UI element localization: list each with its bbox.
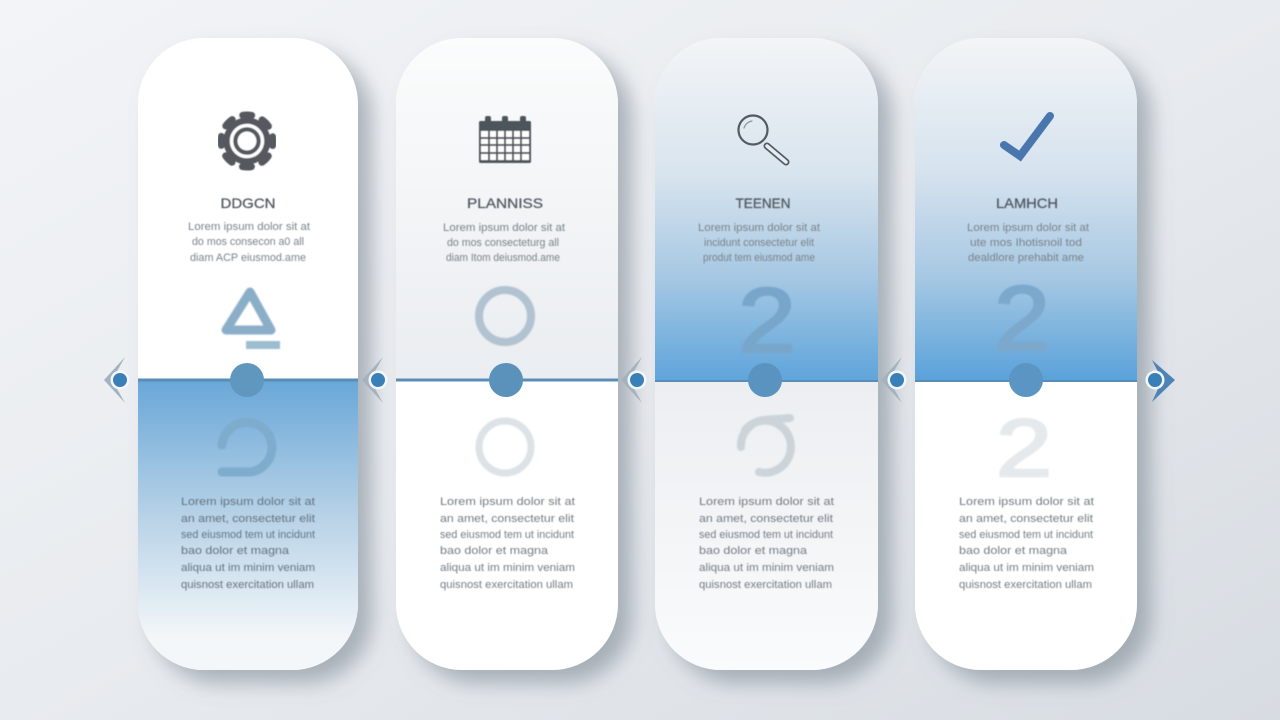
text block: step 3 lower: quisnost exercitation ullam: [699, 579, 832, 591]
text block: step 1 upper: [188, 221, 310, 264]
text block: step 4 lower: bao dolor et magna: [959, 545, 1068, 557]
text block: step 4 lower: aliqua ut im minim veniam: [959, 562, 1094, 574]
arrow: left chevron 1: [104, 357, 130, 403]
text block: step 1 lower: aliqua ut im minim veniam: [181, 562, 315, 574]
text block: step 3 lower: [699, 496, 834, 591]
text block: step 1 lower: [181, 496, 315, 591]
numeral: upper 2: 2: [994, 268, 1050, 370]
numeral: lower 2: 2: [996, 403, 1052, 494]
icon: lower arc numeral: [741, 418, 791, 473]
text block: step 3 lower: aliqua ut im minim veniam: [699, 562, 834, 574]
arrow: left chevron 4: [881, 357, 906, 403]
text block: step 2 upper: diam Itom deiusmod.ame: [446, 252, 560, 264]
heading: step 4: LAMHCH: [996, 195, 1058, 211]
panel: step 2 planning: [396, 38, 618, 670]
text block: step 4 lower: sed eiusmod tem ut incidunt: [959, 529, 1093, 541]
numeral: upper 2: 2: [738, 270, 796, 372]
text block: step 2 lower: bao dolor et magna: [440, 545, 549, 557]
text block: step 3 upper: produt tem eiusmod ame: [703, 252, 815, 264]
node: step 3 connector: [748, 363, 782, 397]
panel: step 1 design: [138, 38, 358, 670]
node: step 2 connector: [489, 363, 523, 397]
text block: step 4 lower: quisnost exercitation ullam: [959, 579, 1092, 591]
text block: step 2 upper: Lorem ipsum dolor sit at: [443, 222, 565, 234]
arrow: right chevron end: [1146, 360, 1175, 402]
text block: step 1 lower: quisnost exercitation ullam: [181, 579, 314, 591]
text block: step 2 lower: [440, 496, 575, 591]
text block: step 2 lower: an amet, consectetur elit: [440, 513, 574, 525]
text block: step 3 upper: [698, 222, 820, 264]
text block: step 1 lower: sed eiusmod tem ut incidunt: [181, 529, 315, 541]
text block: step 1 lower: an amet, consectetur elit: [181, 513, 315, 525]
node: step 1 connector: [230, 363, 264, 397]
text block: step 4 upper: dealdlore prehabit ame: [968, 252, 1084, 264]
panel: step 4 launch: [915, 38, 1137, 670]
text block: step 3 upper: Lorem ipsum dolor sit at: [698, 222, 820, 234]
icon: lower ring numeral: [479, 421, 531, 473]
text block: step 1 lower: bao dolor et magna: [181, 545, 290, 557]
icon: gear: [221, 115, 273, 167]
icon: lower arc numeral: [222, 422, 272, 472]
panel: step 3 testing: [655, 38, 878, 670]
text block: step 1 upper: Lorem ipsum dolor sit at: [188, 221, 310, 233]
text block: step 4 upper: ute mos Ihotisnoil tod: [970, 237, 1082, 249]
icon: triangle numeral: [226, 292, 280, 345]
icon: calendar: [479, 116, 531, 163]
heading: step 1: DDGCN: [220, 195, 276, 211]
icon: check mark: [1004, 116, 1050, 156]
text block: step 2 lower: sed eiusmod tem ut incidunt: [440, 529, 574, 541]
arrow: left chevron 2: [362, 357, 388, 403]
text block: step 2 lower: quisnost exercitation ullam: [440, 579, 573, 591]
text block: step 3 lower: sed eiusmod tem ut incidunt: [699, 529, 833, 541]
arrow: left chevron 3: [621, 357, 646, 403]
text block: step 4 lower: an amet, consectetur elit: [959, 513, 1093, 525]
text block: step 4 lower: [959, 496, 1094, 591]
text block: step 3 lower: an amet, consectetur elit: [699, 513, 833, 525]
text block: step 3 lower: Lorem ipsum dolor sit at: [699, 496, 834, 508]
text block: step 2 lower: Lorem ipsum dolor sit at: [440, 496, 575, 508]
heading: step 3: TEENEN: [736, 195, 790, 211]
text block: step 1 lower: Lorem ipsum dolor sit at: [181, 496, 315, 508]
text block: step 1 upper: do mos consecon a0 all: [192, 236, 304, 248]
text block: step 2 upper: [443, 222, 565, 264]
icon: magnifier: [738, 116, 786, 162]
text block: step 1 upper: diam ACP eiusmod.ame: [190, 252, 306, 264]
text block: step 2 lower: aliqua ut im minim veniam: [440, 562, 575, 574]
text block: step 4 lower: Lorem ipsum dolor sit at: [959, 496, 1094, 508]
text block: step 2 upper: do mos consecteturg all: [447, 237, 559, 249]
heading: step 2: PLANNISS: [467, 195, 543, 211]
node: step 4 connector: [1009, 363, 1043, 397]
text block: step 3 lower: bao dolor et magna: [699, 545, 808, 557]
text block: step 4 upper: Lorem ipsum dolor sit at: [967, 222, 1089, 234]
icon: ring numeral: [479, 290, 531, 342]
text block: step 4 upper: [967, 222, 1089, 264]
text block: step 3 upper: incidunt consectetur elit: [704, 237, 814, 249]
